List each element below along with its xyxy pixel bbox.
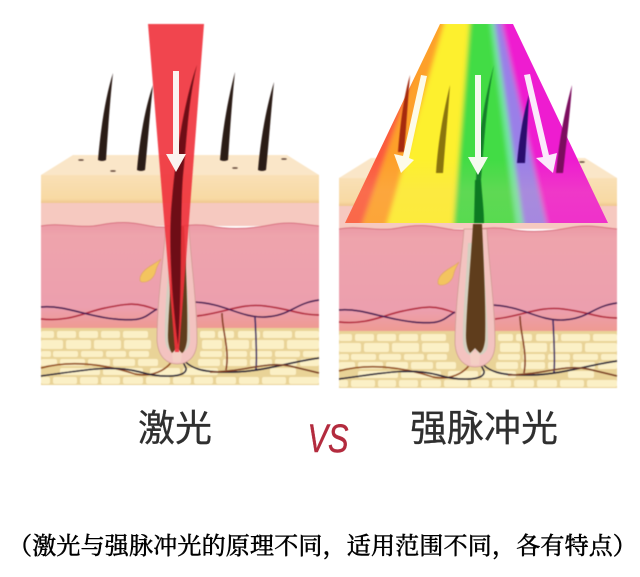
skin cross-section: laser side: [41, 155, 319, 385]
hairs under rainbow beam: [398, 65, 572, 223]
white arrow: center: [468, 75, 488, 175]
panel: laser diagram: [41, 24, 319, 385]
white arrow: right: [524, 74, 557, 173]
hairs: laser side: [98, 72, 274, 171]
heading: VS: VS: [308, 417, 349, 461]
heading: laser: 激光: [138, 398, 212, 452]
caption: （激光与强脉冲光的原理不同，适用范围不同，各有特点）: [8, 526, 637, 561]
panel: intense pulsed light diagram: [335, 20, 625, 388]
skin cross-section: IPL side: [339, 158, 617, 388]
rainbow light beam: [345, 24, 608, 223]
white arrow: left: [394, 75, 427, 173]
hair shaft in follicle: IPL side: [466, 224, 485, 353]
laser red beam: [148, 24, 204, 352]
heading: intense pulsed light: 强脉冲光: [410, 398, 558, 452]
white arrow: laser: [166, 71, 186, 172]
hair root in follicle: laser side: [168, 226, 187, 353]
hair shaft inside laser beam: [170, 65, 197, 345]
